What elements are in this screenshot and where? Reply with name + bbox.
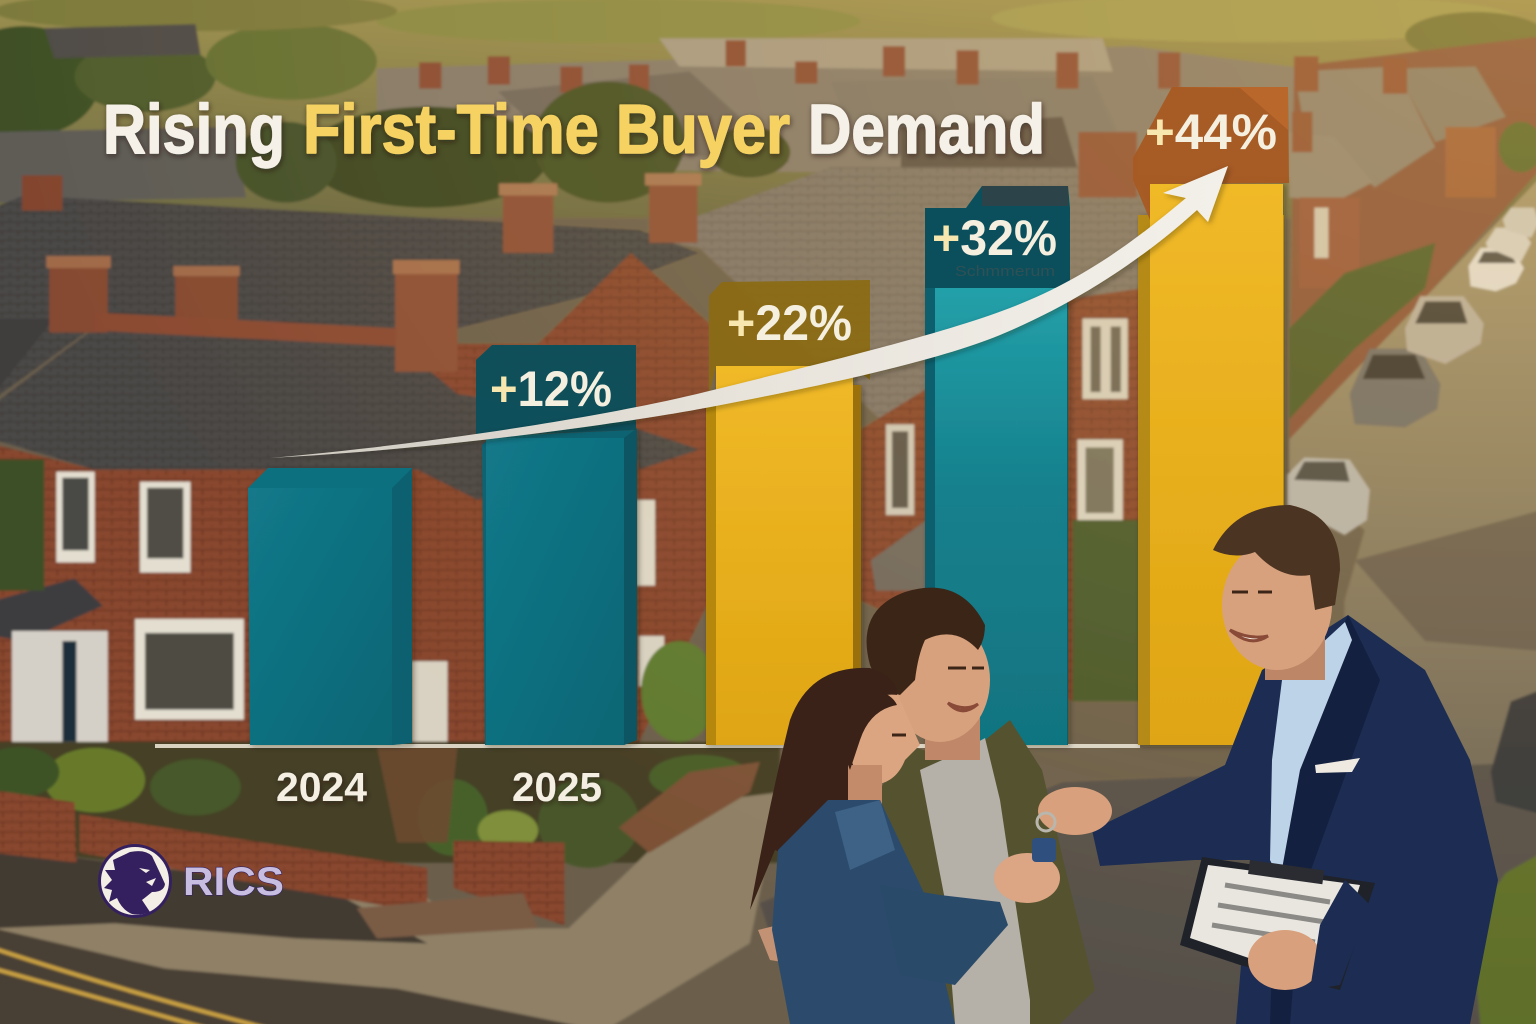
year label: 2024: 2024 xyxy=(276,764,367,810)
RICS logo xyxy=(98,844,284,918)
people: couple receiving keys from agent xyxy=(750,505,1498,1024)
background: central brick houses xyxy=(861,288,1143,702)
title xyxy=(103,90,1045,168)
logo: wordmark: RICS xyxy=(183,860,284,904)
background: tree shadow on road xyxy=(1355,510,1536,651)
background: central roof xyxy=(639,167,1163,429)
background: front garden xyxy=(0,641,780,868)
bar chart xyxy=(155,87,1289,810)
growth arrow xyxy=(270,166,1228,458)
background: right-hand terrace xyxy=(1289,36,1536,450)
bar: 2026 gold xyxy=(706,366,861,745)
background: front slate roof xyxy=(0,320,699,500)
background: kerbside road xyxy=(0,928,589,1024)
background: lower road right xyxy=(760,762,1536,1024)
background: house windows and porch xyxy=(0,460,664,747)
bar: 2025 xyxy=(482,428,637,745)
woman: hair xyxy=(750,668,897,910)
background: shaded pavement xyxy=(0,848,427,943)
background: left brick house xyxy=(0,444,478,747)
bar: 2028 gold xyxy=(1138,184,1284,745)
label: +22%: +22% xyxy=(727,295,852,351)
label: +32%: Schmmerum xyxy=(955,263,1055,280)
title word: Demand: Demand xyxy=(808,90,1045,168)
label: +12% xyxy=(476,345,636,436)
man: head xyxy=(867,588,990,760)
background: yellow road line xyxy=(0,948,266,1024)
background: back slate roof xyxy=(0,195,699,399)
background: mid trees xyxy=(236,82,790,208)
background: road xyxy=(1289,175,1536,833)
background: chimneys xyxy=(22,132,1137,372)
label: +12%: +12% xyxy=(490,361,612,417)
agent: suit xyxy=(1092,615,1498,1024)
year label: 2025: 2025 xyxy=(512,764,602,810)
background: left slate roof edge xyxy=(0,318,54,394)
woman: face xyxy=(835,690,920,810)
label: +32% xyxy=(925,186,1070,288)
label: +44%: +44% xyxy=(1145,104,1277,160)
agent: hand on clipboard xyxy=(1248,880,1370,990)
title word: Rising: Rising xyxy=(103,90,285,168)
title highlight: First-Time Buyer: First-Time Buyer xyxy=(303,90,790,168)
clipboard xyxy=(1180,857,1375,990)
agent: pocket square xyxy=(1315,758,1360,773)
agent: shirt xyxy=(1270,622,1352,880)
label: +32%: +32% xyxy=(932,210,1057,266)
background: sky and distant trees xyxy=(0,0,1536,218)
woman: denim jacket xyxy=(772,800,1008,1024)
background: parked cars xyxy=(1287,208,1536,814)
baseline xyxy=(155,744,1140,748)
label: +44% xyxy=(1133,87,1289,220)
agent: head xyxy=(1213,505,1340,680)
man: olive jacket and shirt xyxy=(758,720,1095,1024)
bar: 2027 teal xyxy=(925,288,1068,745)
agent: hand with keys xyxy=(1032,787,1112,862)
bar: 2024 xyxy=(248,468,412,745)
logo: lion emblem xyxy=(98,844,172,918)
background: bottom right hedge xyxy=(1471,853,1536,1024)
background: garden brick walls xyxy=(0,762,760,938)
background: brick gable xyxy=(407,253,710,742)
label: +22% xyxy=(709,280,870,395)
background: pavement xyxy=(0,792,780,1024)
background: distant roof rows xyxy=(0,24,1304,203)
woman: hand holding keys xyxy=(994,853,1060,903)
